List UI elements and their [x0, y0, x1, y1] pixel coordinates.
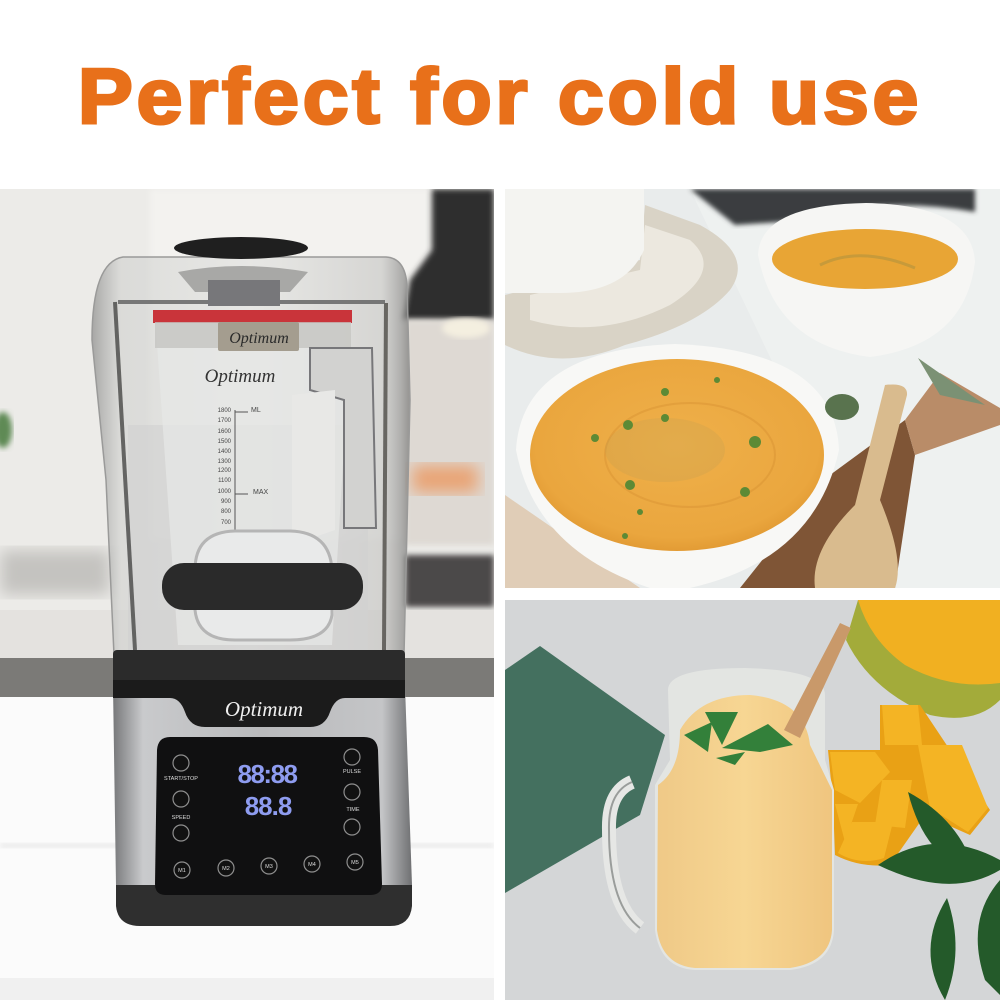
- jar scale: 1100: [218, 478, 232, 484]
- wooden board: [505, 373, 1000, 588]
- jar scale: 800: [221, 509, 232, 515]
- control panel: 88.8: [245, 791, 292, 821]
- blender: Optimum: [225, 697, 303, 721]
- control panel: PULSE: [343, 769, 361, 775]
- green napkin: [505, 646, 665, 893]
- jar scale: 1700: [218, 418, 232, 424]
- steel base: [113, 686, 412, 885]
- control panel: TIME: [346, 807, 360, 813]
- mint garnish: [684, 712, 793, 765]
- display: 88:88: [238, 759, 298, 789]
- green leaves: [878, 792, 1000, 1000]
- woven coaster: [505, 205, 738, 358]
- blender: [92, 237, 412, 926]
- control panel: [155, 737, 382, 895]
- jar scale: ML: [251, 407, 261, 414]
- back bowl of soup: [758, 203, 975, 357]
- title: Perfect for cold use: [78, 52, 922, 140]
- sound enclosure: [92, 257, 410, 655]
- cubed mango: [828, 705, 990, 866]
- jar scale: 1200: [218, 468, 232, 474]
- photo: blender in kitchen: [0, 189, 494, 1000]
- jar handle: [310, 348, 376, 528]
- lid: [174, 237, 308, 306]
- control panel: M4: [308, 862, 316, 868]
- jar scale: 1300: [218, 459, 232, 465]
- wooden spoon: [814, 384, 907, 588]
- photo: mango smoothie: [505, 600, 1000, 1000]
- brand plate: [218, 322, 299, 351]
- jar scale: 700: [221, 520, 232, 526]
- control panel: SPEED: [172, 815, 190, 821]
- front bowl of soup: [516, 344, 839, 588]
- clear hatch and handle: [195, 531, 332, 640]
- glass jar of smoothie: [609, 668, 834, 970]
- jar scale: [218, 407, 268, 530]
- table background: [505, 189, 1000, 588]
- jar scale: 1500: [218, 439, 232, 445]
- control panel: START/STOP: [164, 776, 198, 782]
- dark base collar: [113, 650, 405, 686]
- jar scale: 900: [221, 499, 232, 505]
- kitchen background: [0, 189, 494, 1000]
- control panel: M5: [351, 860, 359, 866]
- jar scale: 1400: [218, 449, 232, 455]
- bamboo straw: [784, 623, 851, 738]
- herb sprigs: [825, 358, 985, 420]
- control panel: M3: [265, 864, 273, 870]
- grey background: [505, 600, 1000, 1000]
- blender: Optimum: [205, 366, 275, 387]
- mango half: [846, 600, 1000, 718]
- photo: soup bowls: [505, 189, 1000, 588]
- control panel: M1: [178, 868, 186, 874]
- jar scale: MAX: [253, 489, 268, 496]
- control panel: M2: [222, 866, 230, 872]
- jar scale: 1000: [218, 489, 232, 495]
- white cup: [505, 189, 644, 293]
- jar: [155, 315, 352, 645]
- jar scale: 1600: [218, 429, 232, 435]
- brand plate: Optimum: [229, 330, 289, 347]
- jar scale: 1800: [218, 408, 232, 414]
